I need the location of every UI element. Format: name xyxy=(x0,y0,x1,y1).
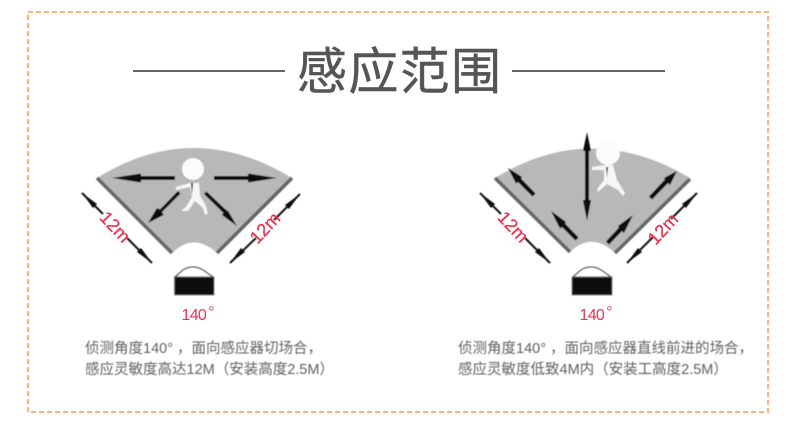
caption: left: 侦测角度140° ，面向感应器切场合， 感应灵敏度高达12M（安装高度2.5M） xyxy=(85,341,334,378)
sector edges xyxy=(97,178,292,253)
label: left 140 degrees: 140 xyxy=(182,307,207,324)
label: right 12m: 12m xyxy=(644,209,682,249)
person xyxy=(176,158,208,215)
label: left 12m: 12m xyxy=(96,207,134,247)
diagram: left coverage sector xyxy=(82,148,300,295)
arrow: center vertical xyxy=(583,132,591,221)
caption: right: 侦测角度140° ，面向感应器直线前进的场合， 感应灵敏度低致4M内（安装工高度2.5M） xyxy=(458,341,753,378)
arrow: right xyxy=(214,174,277,182)
sensor xyxy=(572,267,612,295)
label: right 12m: 12m xyxy=(246,208,284,248)
dimension arrow left xyxy=(480,193,550,263)
dimension arrow right xyxy=(230,194,300,263)
label: left 140 degrees: ° xyxy=(208,304,214,321)
arrow: left xyxy=(112,174,175,182)
arrow: lower left xyxy=(551,211,578,240)
title with side rules: 感应范围 xyxy=(297,44,501,100)
label: right 140 degrees: 140 xyxy=(580,307,605,324)
arrow: upper right xyxy=(649,171,677,200)
label: right 140 degrees: ° xyxy=(606,304,612,321)
arrow: lower right xyxy=(606,215,633,244)
dimension arrow left xyxy=(82,193,152,263)
sensor xyxy=(174,267,214,295)
arrow: lower left xyxy=(148,191,180,223)
sector edges xyxy=(495,178,690,253)
arrow: lower right xyxy=(204,192,237,226)
dimension arrow right xyxy=(627,193,697,263)
person xyxy=(592,141,625,196)
arrow: upper left xyxy=(508,168,536,196)
diagram: right coverage sector xyxy=(480,132,697,295)
label: left 12m: 12m xyxy=(494,207,532,247)
sector xyxy=(495,148,690,253)
sector xyxy=(97,148,292,253)
